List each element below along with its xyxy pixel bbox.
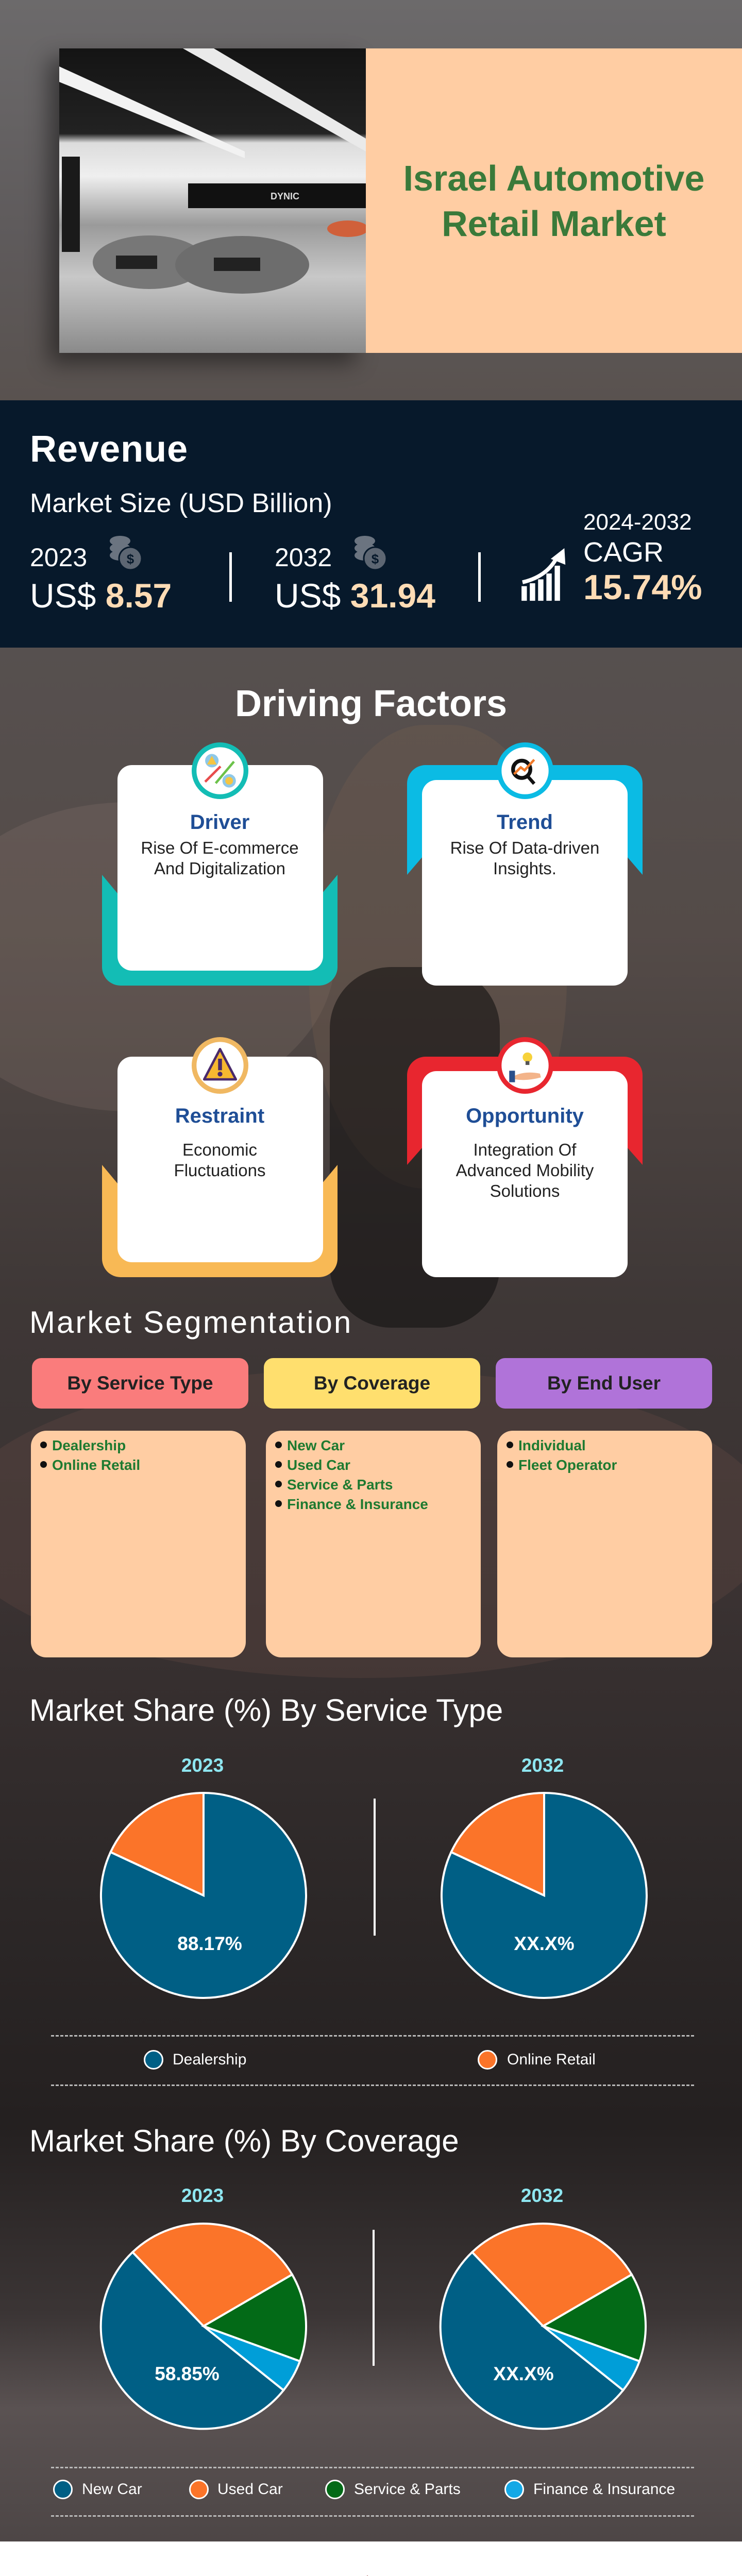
divider <box>373 2230 375 2366</box>
CAGR: CAGR <box>583 537 664 568</box>
pie chart: service type 2032: XX.X% <box>514 1933 575 1954</box>
icon: trend magnifier <box>497 742 553 799</box>
segmentation header: coverage: By Coverage <box>314 1372 430 1394</box>
2032 value: $ <box>372 551 379 567</box>
pie chart: coverage 2023 <box>100 2223 307 2430</box>
heading: market segmentation: Market Segmentation <box>29 1305 352 1340</box>
legend: service type: Online Retail <box>507 2051 596 2068</box>
card: trend: Trend <box>497 811 553 834</box>
footer background <box>0 2541 742 2576</box>
CAGR: 2024-2032 <box>583 510 692 535</box>
divider <box>374 1799 376 1936</box>
legend: coverage: Finance & Insurance <box>533 2481 675 2498</box>
CAGR: 15.74% <box>583 568 702 607</box>
segmentation header: coverage <box>264 1358 480 1409</box>
hero image: showroom <box>59 48 366 353</box>
card: opportunity: Solutions <box>490 1181 560 1200</box>
pie chart: service type 2032 <box>440 1792 648 1999</box>
2023 value: $ <box>127 551 134 567</box>
card: restraint: Restraint <box>175 1105 264 1127</box>
icon: driver gears <box>192 742 248 799</box>
legend: coverage: New Car <box>82 2481 142 2498</box>
hero image: showroom: DYNIC <box>271 191 299 201</box>
segment list: service type <box>31 1431 246 1657</box>
segment list: service type: Online Retail <box>52 1457 140 1473</box>
card: opportunity: Opportunity <box>466 1105 584 1127</box>
legend: coverage: Used Car <box>217 2481 283 2498</box>
header background <box>0 0 742 400</box>
segment list: end user <box>497 1431 712 1657</box>
title panel <box>366 48 742 353</box>
heading: driving factors: Driving Factors <box>235 683 507 724</box>
pie chart: coverage 2023: 58.85% <box>155 2363 220 2384</box>
segmentation header: end user: By End User <box>547 1372 661 1394</box>
2023 value: US$ 8.57 <box>30 577 172 615</box>
icon: idea hand <box>497 1037 553 1094</box>
card: restraint: Fluctuations <box>174 1161 265 1180</box>
card: driver: And Digitalization <box>154 859 285 878</box>
segment list: service type: Dealership <box>52 1437 126 1453</box>
card: opportunity <box>407 1037 643 1277</box>
segmentation header: service type <box>32 1358 248 1409</box>
card: trend: Insights. <box>493 859 556 878</box>
card: driver: Rise Of E-commerce <box>141 838 299 857</box>
heading: market share by coverage: Market Share (%) By Coverage <box>29 2124 459 2158</box>
card: trend <box>407 742 643 986</box>
segment list: end user: Individual <box>518 1437 586 1453</box>
main photo background <box>0 648 742 2541</box>
segment list: coverage: Used Car <box>287 1457 350 1473</box>
year label 2032: 2032 <box>521 2185 563 2206</box>
2032 value: US$ 31.94 <box>275 577 435 615</box>
2032 value: 2032 <box>275 543 332 572</box>
CAGR <box>583 510 702 607</box>
pie chart: service type 2023: 88.17% <box>177 1933 242 1954</box>
market size label: Market Size (USD Billion) <box>30 488 332 518</box>
card: opportunity: Integration Of <box>474 1140 576 1159</box>
pie chart: service type 2023 <box>100 1792 307 1999</box>
segment list: coverage <box>266 1431 481 1657</box>
legend: service type <box>144 2050 596 2070</box>
segmentation header: end user <box>496 1358 712 1409</box>
icon: warning <box>192 1037 248 1094</box>
segment list: coverage: Finance & Insurance <box>287 1496 428 1512</box>
title panel: Retail Market <box>442 204 666 244</box>
segmentation header: service type: By Service Type <box>67 1372 213 1394</box>
title panel: Israel Automotive <box>403 158 704 198</box>
card: driver: Driver <box>190 811 249 834</box>
segment list: end user: Fleet Operator <box>518 1457 617 1473</box>
year label 2023: 2023 <box>181 2185 224 2206</box>
revenue section <box>0 400 742 648</box>
2032 value <box>275 536 435 615</box>
segment list: coverage: New Car <box>287 1437 345 1453</box>
year label 2023: 2023 <box>181 1755 224 1776</box>
card: restraint <box>102 1037 338 1277</box>
year label 2032: 2032 <box>521 1755 564 1776</box>
heading: market share by service type: Market Share (%) By Service Type <box>29 1693 503 1727</box>
segment list: coverage: Service & Parts <box>287 1477 393 1493</box>
2023 value: 2023 <box>30 543 87 572</box>
card: opportunity: Advanced Mobility <box>456 1161 594 1180</box>
pie chart: coverage 2032 <box>439 2223 647 2430</box>
pie chart: coverage 2032: XX.X% <box>493 2363 554 2384</box>
divider 2 <box>478 552 481 602</box>
legend: coverage <box>53 2480 675 2499</box>
divider 1 <box>229 552 232 602</box>
card: restraint: Economic <box>182 1140 257 1159</box>
revenue heading: Revenue <box>30 429 188 470</box>
card: driver <box>102 742 338 986</box>
legend: coverage: Service & Parts <box>354 2481 461 2498</box>
card: trend: Rise Of Data-driven <box>450 838 599 857</box>
2023 value <box>30 536 172 615</box>
icon: growth chart <box>521 548 566 601</box>
legend: service type: Dealership <box>173 2051 246 2068</box>
